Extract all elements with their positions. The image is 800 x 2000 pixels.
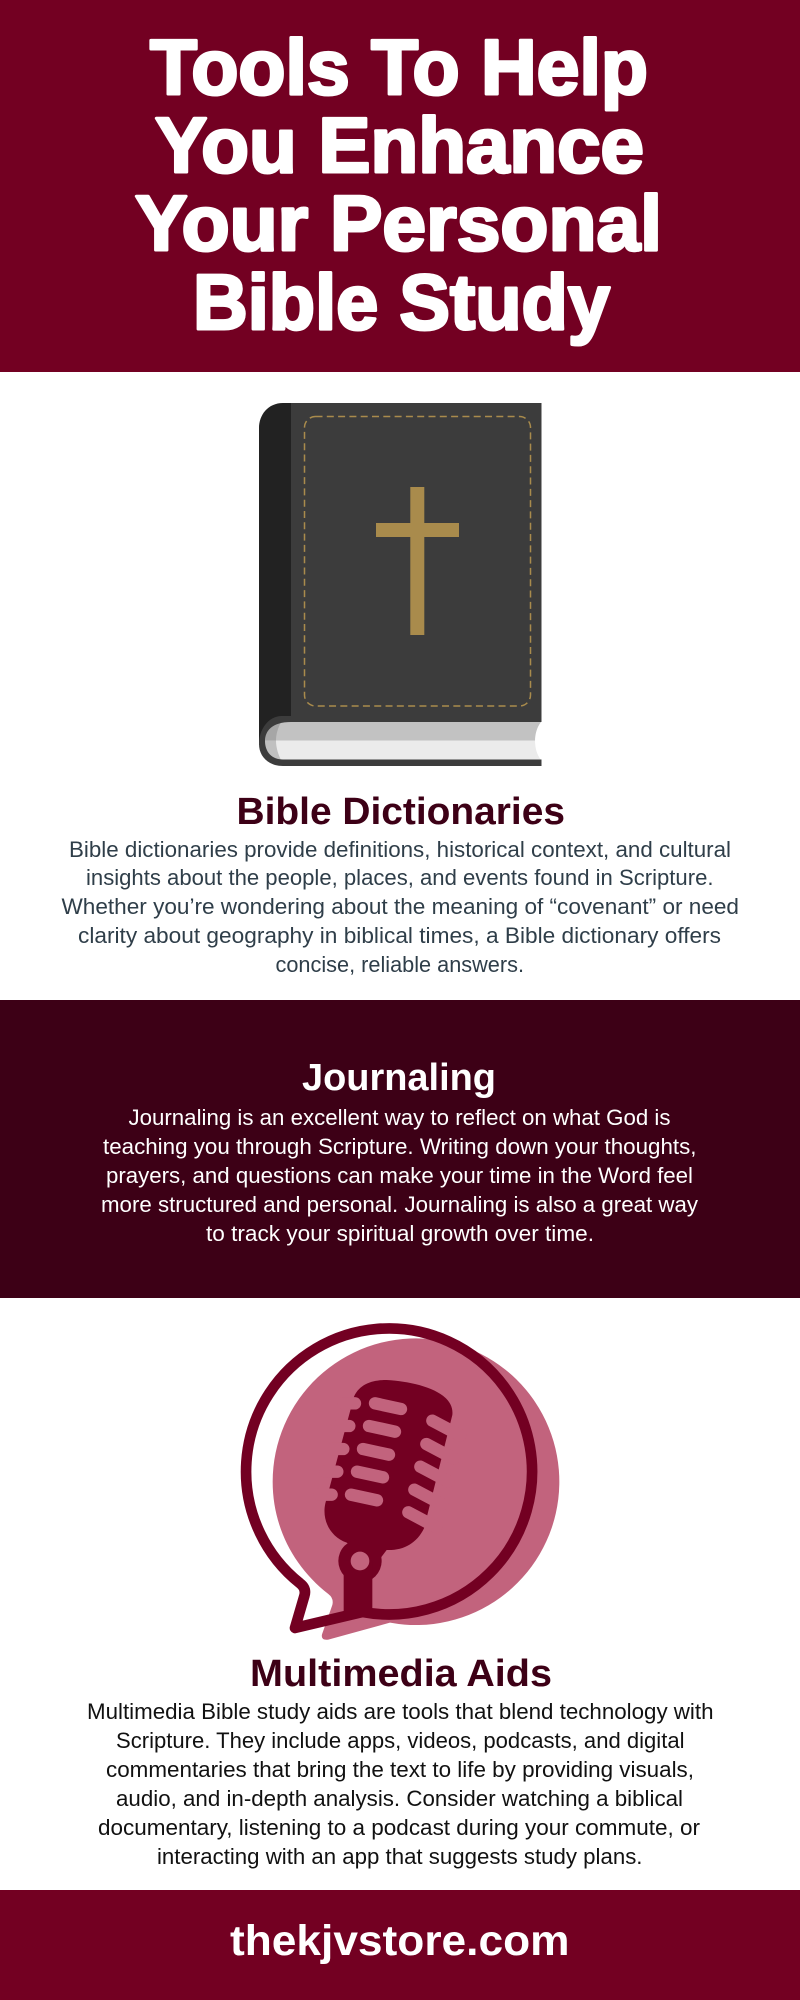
footer website: thekjvstore.com (230, 1917, 570, 1965)
text block: multimedia aids: Scripture. They include apps, videos, podcasts, and digital (116, 1728, 684, 1753)
panel: journaling (0, 1000, 800, 1298)
panel: bible dictionaries (62, 403, 739, 977)
text block: multimedia aids: audio, and in-depth analysis. Consider watching a biblical (116, 1786, 683, 1811)
text block: bible dictionaries (62, 837, 739, 977)
text block: multimedia aids (87, 1699, 713, 1869)
text block: journaling: Journaling is an excellent way to reflect on what God is (128, 1105, 670, 1130)
panel: header (0, 0, 800, 372)
text block: multimedia aids: interacting with an app that suggests study plans. (157, 1844, 642, 1869)
text block: journaling: prayers, and questions can make your time in the Word feel (106, 1163, 693, 1188)
panel: multimedia aids (87, 1328, 713, 1869)
title: Tools To Help (150, 23, 648, 111)
title: Bible Study (193, 258, 610, 346)
text block: journaling: more structured and personal. Journaling is also a great way (101, 1192, 698, 1217)
text block: multimedia aids: documentary, listening to a podcast during your commute, or (98, 1815, 700, 1840)
panel: footer (0, 1890, 800, 2000)
icon: microphone in speech bubble (246, 1328, 559, 1640)
text block: journaling: to track your spiritual growth over time. (206, 1221, 594, 1246)
heading: multimedia aids: Multimedia Aids (250, 1653, 552, 1695)
icon: bible book (259, 403, 542, 766)
title (135, 23, 662, 346)
heading: journaling: Journaling (302, 1057, 496, 1099)
text block: multimedia aids: Multimedia Bible study aids are tools that blend technology with (87, 1699, 713, 1724)
heading: bible dictionaries: Bible Dictionaries (236, 791, 565, 833)
text block: journaling: teaching you through Scripture. Writing down your thoughts, (103, 1134, 696, 1159)
text block: bible dictionaries: concise, reliable answers. (276, 952, 524, 977)
title: You Enhance (155, 101, 644, 189)
text block: bible dictionaries: Whether you’re wondering about the meaning of “covenant” or need (62, 894, 739, 919)
text block: bible dictionaries: clarity about geography in biblical times, a Bible dictionary offers (78, 923, 721, 948)
text block: multimedia aids: commentaries that bring the text to life by providing visuals, (106, 1757, 694, 1782)
title: Your Personal (135, 179, 662, 267)
text block: bible dictionaries: Bible dictionaries provide definitions, historical context, and cultural (69, 837, 731, 862)
text block: bible dictionaries: insights about the people, places, and events found in Scripture. (86, 865, 714, 890)
text block: journaling (101, 1105, 698, 1246)
